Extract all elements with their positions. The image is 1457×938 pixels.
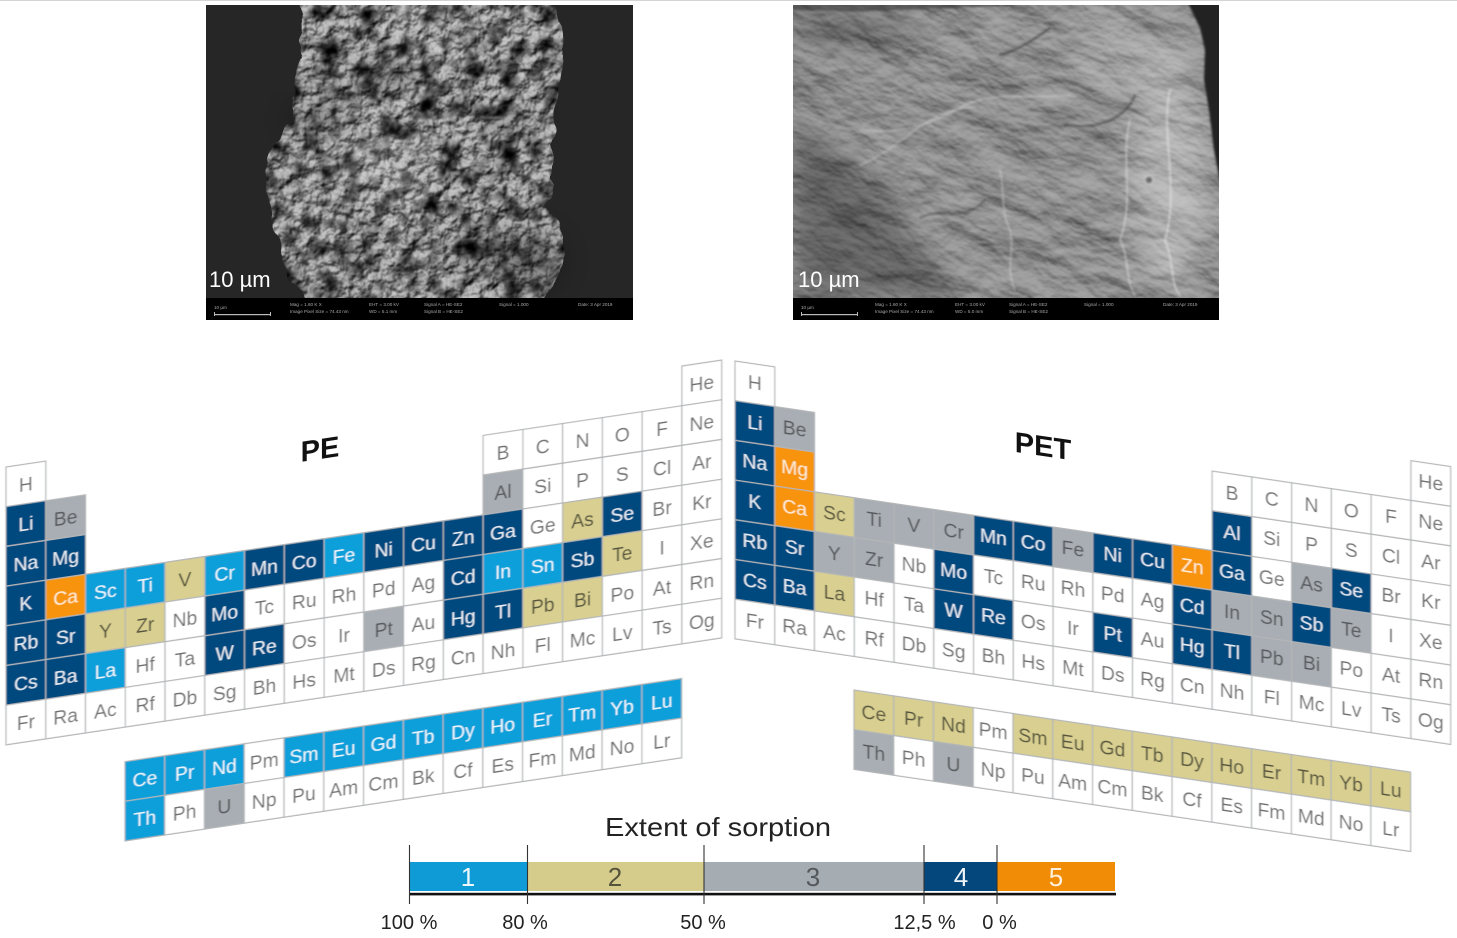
periodic table: PE: Ca	[53, 585, 78, 611]
periodic table: PE: Rg	[411, 651, 436, 676]
periodic table: PE: Pt	[375, 618, 393, 642]
periodic table: PE: Nb	[173, 607, 197, 633]
lanthanides and actinides: PET: Tb	[1141, 742, 1164, 767]
periodic table: PET: Ga	[1219, 560, 1245, 586]
lanthanides and actinides: PET: Fm	[1257, 799, 1285, 825]
periodic table: PE: Nh	[491, 639, 515, 665]
periodic table: PET: Y	[828, 542, 841, 566]
periodic table: PET: Tl	[1224, 640, 1240, 665]
lanthanides and actinides: PE: Yb	[610, 695, 634, 721]
periodic table: PET: K	[748, 491, 761, 515]
periodic table: PE: Bh	[253, 675, 276, 700]
lanthanides and actinides: PET: Nd	[941, 713, 966, 738]
periodic table: PE: Rf	[135, 693, 155, 718]
periodic table: PET: Ir	[1067, 617, 1079, 641]
lanthanides and actinides: PE	[125, 678, 682, 841]
info bar: Signal = 1.000	[1084, 302, 1114, 307]
periodic table: PE: Hs	[292, 669, 316, 694]
info bar: Mag = 1.60 K X	[290, 302, 322, 307]
periodic table: PE: N	[576, 429, 590, 453]
lanthanides and actinides: PET	[854, 690, 1411, 851]
periodic table: PE: Br	[652, 496, 672, 521]
periodic table: PET: Ac	[823, 621, 846, 646]
periodic table: PE: Po	[610, 582, 634, 607]
legend colour scale: 4	[954, 862, 968, 892]
periodic table: PET: Nb	[902, 553, 926, 579]
periodic table: PE: Kr	[692, 491, 712, 515]
periodic table: PE: Zn	[452, 526, 475, 551]
periodic table: PET: Po	[1339, 657, 1363, 683]
periodic table: PET: N	[1305, 493, 1319, 517]
lanthanides and actinides: PE: No	[610, 735, 635, 761]
lanthanides and actinides: PET: Bk	[1141, 782, 1164, 807]
periodic table: PE: Co	[292, 550, 317, 575]
periodic table: PET: At	[1382, 664, 1401, 688]
periodic table: PET: Rh	[1061, 577, 1085, 602]
periodic table: PE: C	[536, 435, 550, 459]
info bar: EHT = 3.00 kV	[369, 302, 400, 307]
periodic table: PET: Si	[1263, 527, 1280, 551]
lanthanides and actinides: PET: Ho	[1219, 754, 1244, 779]
periodic table: PE: I	[659, 537, 665, 560]
periodic table: PE: In	[495, 560, 511, 585]
periodic table: PE: Sb	[571, 548, 595, 573]
periodic table: PE: La	[95, 659, 116, 684]
periodic table: PE: Ni	[375, 538, 393, 563]
periodic table: PET: C	[1265, 488, 1279, 511]
periodic table: PE: Ac	[94, 699, 117, 724]
lanthanides and actinides: PE: Ce	[132, 767, 157, 792]
lanthanides and actinides: PET: Cm	[1097, 775, 1128, 802]
periodic table: PET: Fl	[1264, 686, 1280, 710]
lanthanides and actinides: PET: Yb	[1339, 771, 1363, 797]
periodic table: PE: Ti	[137, 574, 153, 598]
periodic table: PE: Hg	[451, 605, 476, 631]
periodic table: PE: Ge	[530, 514, 556, 540]
periodic table: PET: Ni	[1104, 543, 1122, 568]
periodic table: PET: W	[945, 599, 963, 624]
periodic table: PET: Ag	[1141, 588, 1164, 614]
periodic table: PE: Zr	[136, 613, 155, 638]
periodic table: PET: Br	[1381, 584, 1401, 609]
legend tick labels: 0 %	[982, 912, 1017, 934]
periodic table: PET: I	[1388, 625, 1394, 648]
periodic table: PE: Ba	[54, 665, 78, 690]
periodic table: PET: Li	[747, 411, 762, 435]
periodic table: PET: Re	[981, 605, 1006, 630]
periodic table: PET: Cr	[943, 520, 964, 545]
periodic table: PET: Ba	[783, 575, 807, 601]
periodic table: PE	[6, 360, 722, 745]
periodic table: PE: Og	[689, 609, 715, 635]
periodic table: PET: Be	[783, 416, 806, 442]
periodic table: PE: Re	[252, 635, 277, 661]
periodic table: PET: La	[824, 581, 845, 606]
periodic table: PE: Sn	[531, 554, 555, 579]
periodic table: PE: W	[216, 641, 234, 666]
periodic table: PET: P	[1305, 533, 1318, 557]
periodic table: PE: Al	[494, 481, 512, 505]
legend tick labels: 80 %	[502, 912, 548, 934]
periodic table: PET: Ti	[866, 508, 882, 532]
lanthanides and actinides: PET: Pm	[979, 718, 1008, 744]
periodic table: PET: Bh	[982, 644, 1005, 670]
periodic table: PE: Cr	[214, 562, 235, 587]
lanthanides and actinides: PE: U	[217, 795, 231, 819]
info bar: WD = 5.0 mm	[955, 309, 983, 314]
periodic table: PE: Ts	[652, 616, 672, 640]
lanthanides and actinides: PE: Pm	[250, 749, 279, 775]
periodic table: PE: Cn	[451, 645, 476, 671]
periodic table: PET: Cl	[1382, 545, 1400, 569]
periodic table: PET: Au	[1141, 628, 1164, 653]
lanthanides and actinides: PET: Es	[1220, 794, 1243, 819]
periodic table: PE: Se	[610, 502, 634, 528]
lanthanides and actinides: PET: Pr	[904, 707, 924, 732]
lanthanides and actinides: PET: Dy	[1180, 748, 1204, 773]
periodic table: PE: Cd	[451, 566, 476, 591]
periodic table: PET: Hg	[1180, 634, 1205, 659]
periodic table: PE: Bi	[574, 588, 591, 612]
periodic table: PET: Ne	[1418, 510, 1443, 536]
lanthanides and actinides: PE: Dy	[451, 719, 475, 745]
periodic table: PET: Mt	[1062, 656, 1084, 681]
lanthanides and actinides: PE: Pu	[292, 783, 316, 808]
periodic table: PE: Fl	[535, 634, 551, 658]
legend title: Extent of sorption	[605, 812, 831, 842]
periodic table: PET: Ta	[904, 593, 924, 618]
info bar: Mag = 1.60 K X	[875, 302, 907, 307]
lanthanides and actinides: PET: Lu	[1380, 777, 1402, 803]
periodic table: PE: Lv	[612, 621, 633, 646]
periodic table: PET: Cs	[743, 569, 767, 595]
legend: extent of sorption	[381, 812, 1116, 934]
lanthanides and actinides: PE: Nd	[212, 755, 237, 780]
periodic table: PET: Te	[1341, 618, 1362, 643]
periodic table: PE: V	[178, 568, 191, 592]
info bar: 10 µm	[214, 305, 227, 310]
info bar: WD = 5.1 mm	[369, 309, 397, 314]
info bar: Date: 3 Apr 2019	[1163, 302, 1198, 307]
periodic table: PE: S	[616, 463, 629, 487]
periodic table: PET: Kr	[1421, 590, 1441, 615]
periodic table: PE: B	[497, 441, 509, 465]
periodic table: PET: Bi	[1303, 652, 1320, 676]
periodic table: PE: Mg	[52, 545, 79, 571]
periodic table: PET: Sg	[942, 638, 966, 664]
lanthanides and actinides: PE: Tb	[412, 725, 435, 751]
periodic table: PE: Ds	[372, 657, 396, 682]
periodic table: PE: Cl	[653, 457, 671, 482]
periodic table: PE: As	[571, 508, 594, 533]
lanthanides and actinides: PET: Ph	[902, 747, 925, 772]
periodic table: PE: Tc	[255, 596, 274, 620]
lanthanides and actinides: PET: Cf	[1182, 788, 1202, 813]
periodic table: PET: Ar	[1421, 550, 1441, 575]
periodic table: PE: He	[689, 371, 714, 397]
periodic table: PET: Sr	[785, 536, 805, 561]
periodic table: PET: Pd	[1101, 582, 1125, 608]
periodic table: PET: Hf	[864, 587, 884, 612]
periodic table: PE: Cu	[411, 532, 436, 557]
periodic table: PET: Rg	[1140, 668, 1165, 693]
legend colour scale: 3	[806, 862, 820, 892]
periodic table: PE: Db	[173, 686, 197, 712]
info bar: Signal A = HE-SE2	[1009, 302, 1048, 307]
info bar	[206, 298, 633, 320]
periodic table: PE: K	[19, 592, 32, 616]
scale label: 10 µm	[798, 267, 860, 292]
lanthanides and actinides: PET: Gd	[1100, 736, 1125, 762]
periodic table: PE: Li	[18, 513, 33, 537]
lanthanides and actinides: PET: Md	[1298, 805, 1325, 831]
periodic table: PE: Rb	[13, 631, 38, 656]
lanthanides and actinides: PE: Np	[252, 789, 277, 814]
info bar: Signal B = HE-SE2	[424, 309, 463, 314]
periodic table: PE: At	[653, 576, 672, 601]
periodic table: PET: H	[748, 372, 762, 396]
SEM micrograph: PE particle	[206, 0, 633, 320]
periodic table: PE: Cs	[14, 671, 38, 696]
lanthanides and actinides: PET: No	[1339, 811, 1364, 837]
legend colour scale: 1	[461, 862, 475, 892]
info bar: Signal = 1.000	[499, 302, 529, 307]
lanthanides and actinides: PET: Am	[1058, 770, 1087, 796]
periodic table: PET: Og	[1418, 709, 1444, 734]
periodic table: PE: Ag	[412, 572, 435, 597]
lanthanides and actinides: PE: Lr	[653, 730, 671, 754]
periodic table: PE: Na	[13, 551, 38, 577]
periodic table: PE: Pb	[531, 593, 555, 619]
lanthanides and actinides: PE: Gd	[371, 731, 396, 757]
periodic table: PE: Si	[534, 475, 551, 499]
periodic table: PE: Hf	[135, 653, 155, 678]
SEM micrograph: PET particle	[793, 5, 1219, 320]
periodic table: PET: Os	[1021, 610, 1046, 636]
lanthanides and actinides: PET: Pu	[1021, 764, 1045, 790]
periodic table: PE: Rh	[332, 583, 356, 609]
periodic table: PE: Mc	[570, 627, 596, 653]
info bar: 10 µm	[801, 305, 814, 310]
periodic table: PE: P	[576, 469, 589, 493]
legend tick labels: 50 %	[680, 912, 726, 934]
periodic table: PET: Mn	[980, 525, 1007, 551]
periodic table: PET: Ts	[1381, 703, 1401, 728]
info bar: Image Pixel Size = 74.43 nm	[290, 309, 349, 314]
periodic table: PE: O	[615, 423, 630, 448]
heading: PET: PET	[1015, 427, 1071, 467]
periodic table: PET: Mg	[781, 456, 808, 482]
lanthanides and actinides: PE: Pr	[175, 761, 195, 786]
periodic table: PE: Mo	[211, 601, 238, 627]
periodic table: PET: Pb	[1260, 646, 1284, 671]
lanthanides and actinides: PE: Ho	[490, 713, 515, 739]
periodic table: PET: Al	[1223, 521, 1241, 546]
lanthanides and actinides: PE: Fm	[528, 747, 556, 773]
lanthanides and actinides: PET: Sm	[1018, 724, 1047, 750]
lanthanides and actinides: PET: Th	[863, 741, 885, 766]
periodic table: PET: F	[1385, 505, 1397, 529]
scale label: 10 µm	[209, 267, 271, 292]
legend tick labels: 100 %	[381, 912, 438, 934]
periodic table: PET: Se	[1339, 578, 1363, 603]
periodic table: PET: Rf	[864, 627, 884, 652]
lanthanides and actinides: PET: Tm	[1297, 765, 1325, 791]
periodic table: PET: Nh	[1220, 679, 1244, 705]
periodic table: PET: Cu	[1140, 549, 1165, 574]
legend colour scale: 2	[608, 862, 622, 892]
periodic table: PET: Cd	[1180, 594, 1205, 620]
periodic table: PET: Zr	[865, 548, 884, 572]
periodic table: PE: H	[19, 473, 33, 497]
periodic table: PET: V	[907, 514, 920, 538]
lanthanides and actinides: PE: Es	[491, 753, 514, 778]
periodic table: PET: O	[1344, 499, 1359, 523]
lanthanides and actinides: PE: Th	[134, 807, 156, 832]
lanthanides and actinides: PE: Er	[533, 708, 553, 732]
periodic table: PET: Fe	[1062, 537, 1084, 562]
periodic table: PE: Ru	[292, 589, 317, 615]
lanthanides and actinides: PET: Er	[1262, 760, 1282, 785]
periodic table: PE: Au	[412, 611, 435, 637]
lanthanides and actinides: PET: Lr	[1382, 817, 1400, 842]
periodic table: PET: S	[1345, 539, 1358, 563]
periodic table: PE: Sr	[56, 625, 76, 650]
periodic table: PET: Fr	[746, 609, 765, 634]
periodic table: PET: Ra	[782, 615, 807, 640]
lanthanides and actinides: PE: Cf	[453, 759, 473, 784]
lanthanides and actinides: PE: Lu	[651, 690, 673, 715]
periodic table: PE: Ne	[689, 411, 714, 436]
periodic table: PET: Lv	[1341, 697, 1362, 722]
periodic table: PE: Fe	[333, 544, 355, 569]
periodic table: PET: Na	[742, 450, 767, 476]
lanthanides and actinides: PE: Eu	[332, 737, 356, 762]
heading: PE: PE	[301, 431, 339, 469]
periodic table: PET: Ge	[1259, 566, 1285, 592]
lanthanides and actinides: PE: Bk	[412, 765, 435, 790]
info bar: EHT = 3.00 kV	[955, 302, 986, 307]
periodic table: PE: Te	[612, 542, 633, 567]
lanthanides and actinides: PET: Eu	[1061, 730, 1085, 756]
periodic table: PET: Cn	[1180, 674, 1205, 699]
legend colour scale: 5	[1049, 862, 1063, 892]
periodic table: PET: Tc	[984, 565, 1003, 590]
periodic table: PET: Hs	[1021, 650, 1045, 676]
lanthanides and actinides: PE: Am	[329, 776, 358, 803]
info bar: Signal B = HE-SE2	[1009, 309, 1048, 314]
periodic table: PE: Mt	[333, 663, 355, 688]
periodic table: PET: As	[1300, 572, 1323, 597]
info bar	[793, 298, 1219, 320]
periodic table: PE: Sg	[213, 681, 237, 706]
periodic table: PET: Ds	[1101, 662, 1125, 687]
info bar: Date: 3 Apr 2019	[578, 302, 613, 307]
periodic table: PE: Rn	[689, 570, 714, 595]
lanthanides and actinides: PE: Ph	[173, 801, 196, 826]
lanthanides and actinides: PET: Np	[981, 758, 1006, 784]
lanthanides and actinides: PE: Cm	[368, 770, 399, 797]
periodic table: PE: Be	[54, 506, 77, 531]
periodic table: PE: Mn	[251, 555, 278, 581]
info bar: Signal A = HE-SE2	[424, 302, 463, 307]
periodic table: PET: He	[1418, 471, 1443, 496]
periodic table: PE: Ga	[490, 520, 516, 546]
periodic table: PE: Ra	[53, 704, 78, 730]
periodic table: PET: Sb	[1300, 612, 1324, 637]
periodic table: PET	[735, 361, 1451, 744]
periodic table: PET: Pt	[1104, 623, 1122, 647]
lanthanides and actinides: PE: Tm	[568, 701, 596, 727]
legend colour scale	[410, 845, 1116, 904]
lanthanides and actinides: PE: Sm	[289, 743, 318, 769]
legend tick labels: 12,5 %	[893, 912, 956, 934]
periodic table: PET: Mc	[1299, 691, 1325, 717]
periodic table: PET: Ca	[782, 496, 807, 521]
periodic table: PE: Pd	[372, 578, 396, 603]
periodic table: PET: Sc	[823, 502, 846, 527]
periodic table: PE: Ir	[338, 624, 350, 648]
periodic table: PET: Rb	[742, 530, 767, 555]
lanthanides and actinides: PET: Ce	[861, 701, 886, 727]
periodic table: PE: Os	[292, 629, 317, 655]
periodic table: PET: Rn	[1418, 669, 1443, 695]
periodic table: PE: F	[656, 418, 668, 441]
periodic table: PET: Db	[902, 632, 926, 658]
periodic table: PET: Co	[1021, 531, 1046, 557]
periodic table: PET: B	[1226, 482, 1238, 506]
legend tick labels	[381, 912, 1017, 934]
periodic table: PE: Ar	[692, 451, 712, 476]
periodic table: PET: Zn	[1181, 555, 1204, 580]
periodic table: PET: Ru	[1021, 571, 1046, 596]
periodic table: PE: Y	[99, 620, 112, 644]
lanthanides and actinides: PET: U	[946, 753, 960, 777]
periodic table: PE: Tl	[495, 600, 511, 624]
periodic table: PET: Sn	[1260, 606, 1284, 631]
periodic table: PET: In	[1224, 601, 1240, 625]
periodic table: PE: Sc	[94, 579, 117, 605]
info bar: Image Pixel Size = 74.43 nm	[875, 309, 934, 314]
periodic table: PET: Mo	[940, 559, 967, 585]
periodic table: PE: Fr	[17, 711, 36, 735]
lanthanides and actinides: PE: Md	[569, 741, 596, 767]
periodic table: PE: Ta	[175, 647, 195, 672]
periodic table: PET: Xe	[1419, 629, 1443, 655]
periodic table: PE: Xe	[690, 530, 714, 555]
